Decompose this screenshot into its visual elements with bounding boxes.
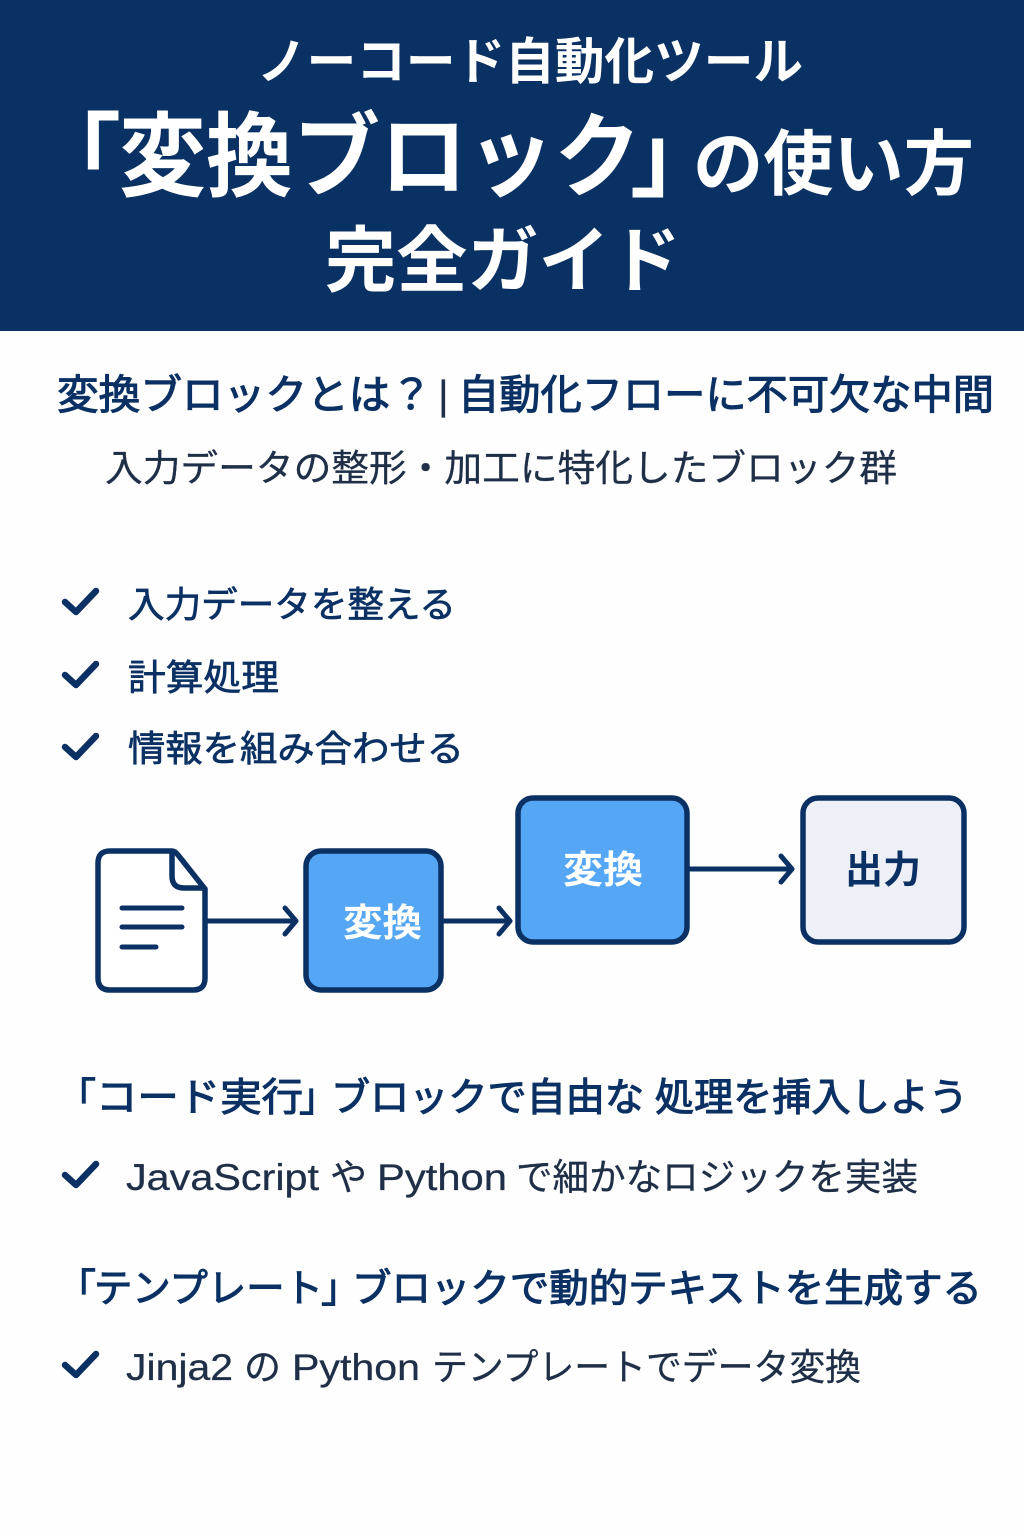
section heading: what is a transform block: | <box>438 372 449 418</box>
bullet: template: Jinja2 <box>126 1347 233 1388</box>
bullet: template: の <box>244 1347 281 1388</box>
bullet: code execution: で細かなロジックを実装 <box>516 1157 918 1198</box>
arrow: transform 1 to transform 2 <box>442 908 510 934</box>
section heading: code execution block: 」 <box>299 1077 338 1120</box>
arrow: document to transform <box>207 908 296 934</box>
item: calculation <box>65 657 279 698</box>
section heading: template block: ブロックで動的テキストを生成する <box>352 1268 982 1311</box>
title line 1: ノーコード自動化ツール <box>257 34 803 90</box>
section heading: what is a transform block <box>57 372 994 418</box>
block: transform 1 <box>306 851 441 990</box>
title line 2 emphasis: 「 <box>29 107 121 209</box>
block: transform 1: 変換 <box>343 903 422 945</box>
section heading: code execution block: 「 <box>57 1077 96 1120</box>
section heading: code execution block: コード実行 <box>96 1077 303 1120</box>
section heading: what is a transform block: 自動化フローに不可欠な中間 <box>458 372 994 418</box>
title line 2 suffix: の使い方 <box>693 126 974 205</box>
bullet: template: Python <box>292 1347 420 1388</box>
item: calculation: 計算処理 <box>128 657 279 698</box>
section heading: template block: 」 <box>321 1268 360 1311</box>
section heading: template block <box>57 1268 982 1311</box>
section heading: code execution block: ブロックで自由な 処理を挿入しよう <box>331 1077 968 1120</box>
title line 2 emphasis: 」 <box>630 107 722 209</box>
item: combine information: 情報を組み合わせる <box>128 728 464 769</box>
section heading: template block: 「 <box>57 1268 96 1311</box>
section heading: what is a transform block: 変換ブロックとは？ <box>57 372 432 418</box>
flow diagram <box>98 798 964 990</box>
section heading: template block: テンプレート <box>94 1268 323 1311</box>
bullet: code execution <box>65 1157 918 1198</box>
bullet: template <box>65 1347 861 1388</box>
title line 3: 完全ガイド <box>325 222 681 302</box>
bullet: template: テンプレートでデータ変換 <box>432 1347 861 1388</box>
title line 2 emphasis: 変換ブロック <box>119 107 641 209</box>
block: output <box>803 798 964 942</box>
block: transform 2: 変換 <box>563 850 643 892</box>
arrow: transform 2 to output <box>688 856 792 882</box>
block: output: 出力 <box>845 850 921 892</box>
section subtitle: 入力データの整形・加工に特化したブロック群 <box>105 448 897 489</box>
section heading: code execution block <box>57 1077 968 1120</box>
bullet: code execution: や <box>330 1157 367 1198</box>
checklist: uses <box>65 584 464 769</box>
bullet: code execution: Python <box>377 1157 507 1198</box>
title banner <box>0 0 1024 331</box>
bullet: code execution: JavaScript <box>126 1157 320 1198</box>
block: transform 2 <box>518 798 687 942</box>
icon: input document <box>98 851 205 990</box>
item: arrange input: 入力データを整える <box>128 584 456 625</box>
